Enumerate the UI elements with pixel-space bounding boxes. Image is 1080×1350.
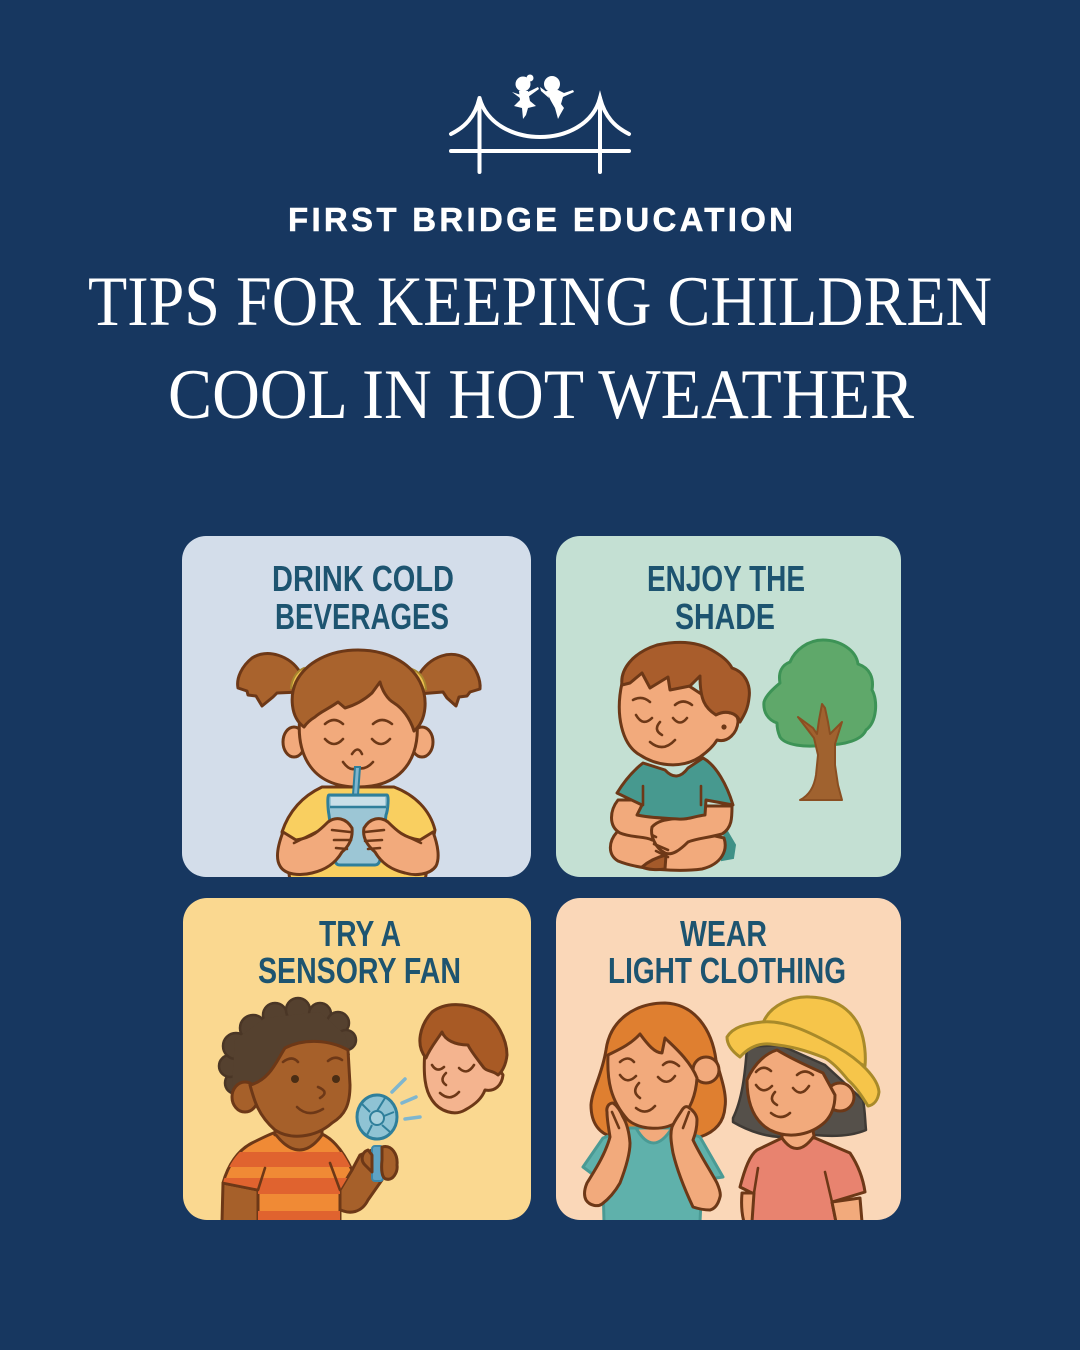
heading: try a sensory fan: SENSORY FAN [258,950,461,991]
illustration: boy holding a fan [219,998,507,1222]
panel: wear light clothing [556,898,901,1222]
heading: drink cold beverages: BEVERAGES [275,596,449,637]
logo: bridge with two children [451,74,629,172]
illustration: girl with orange hair [583,1003,725,1222]
heading: wear light clothing: LIGHT CLOTHING [608,950,846,991]
heading: drink cold beverages [272,558,454,637]
title: TIPS FOR KEEPING CHILDREN [88,263,992,341]
illustration: girl with yellow hat [727,997,879,1222]
brand name: FIRST BRIDGE EDUCATION [288,201,793,238]
heading: enjoy the shade: SHADE [675,596,775,637]
illustration: boy sitting cross-legged [610,642,749,870]
heading: drink cold beverages: DRINK COLD [272,558,454,599]
icon: handheld fan [357,1095,397,1181]
panel: drink cold beverages [182,536,531,880]
heading: wear light clothing: WEAR [680,913,767,954]
panel: try a sensory fan [183,898,531,1222]
heading: enjoy the shade [647,558,805,637]
heading: wear light clothing [608,913,846,991]
title: COOL IN HOT WEATHER [168,356,915,434]
icon: wind lines [392,1079,420,1119]
heading: try a sensory fan [258,913,461,991]
icon: tree [764,640,876,800]
panel: enjoy the shade [556,536,901,877]
heading: enjoy the shade: ENJOY THE [647,558,805,599]
heading: try a sensory fan: TRY A [319,913,401,954]
illustration: girl drinking through a straw [238,650,480,880]
title [88,263,992,434]
illustration: cooled child's face [420,1005,507,1113]
